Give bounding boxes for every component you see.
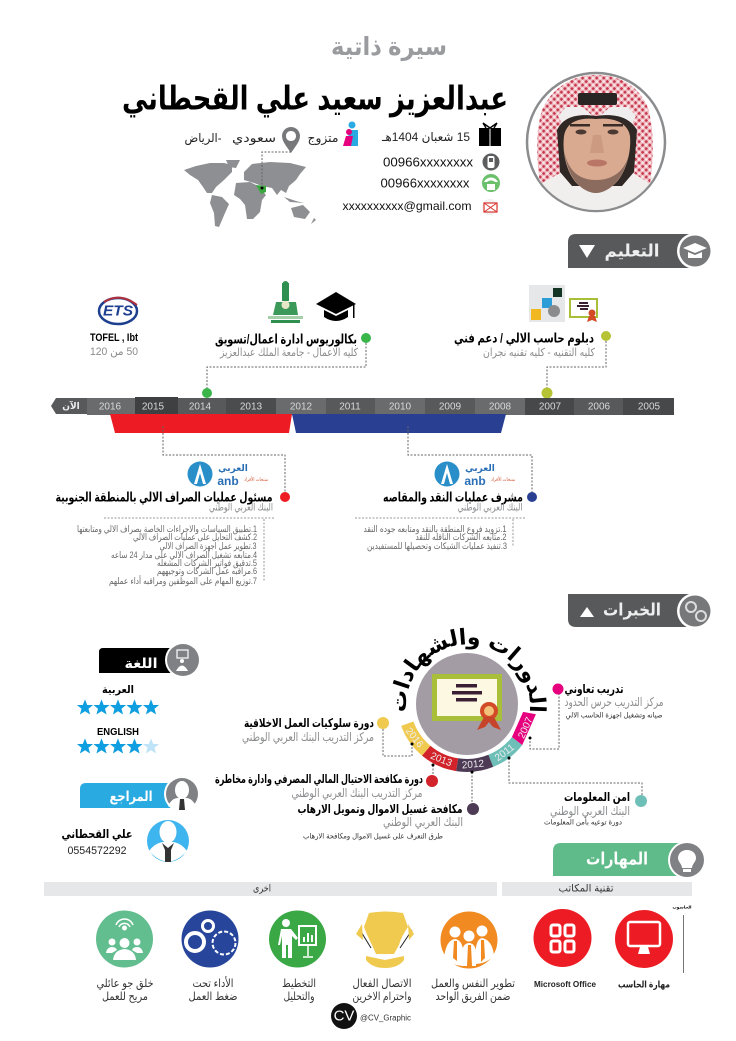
brand logo: CV [334,1008,354,1024]
courses wheel: 2013 [429,751,454,769]
icon: certificate small [570,299,597,322]
birth date: 15 شعبان 1404هـ [381,130,470,144]
icon: ETS logo: ETS [103,302,133,320]
logo: anb left: منتجات الأفراد [244,476,268,483]
title: CV: سيرة ذاتية [331,33,447,62]
job: cash supervisor: 3.تنفيذ عمليات الشيكات وتحصيلها للمستفيدين [367,541,507,551]
city: -الرياض [184,131,222,146]
section header: education: التعليم [604,242,660,260]
email: xxxxxxxxxx@gmail.com [342,199,472,213]
course: information security: البنك العربي الوطني [550,804,630,819]
timeline bar: 2009 [439,402,462,412]
course: information security: دورة توعيه بأمن المعلومات [544,816,622,826]
job: cash supervisor: مشرف عمليات النقد والمقاصه [383,490,523,504]
language: English rating [77,726,159,753]
timeline bar: 2008 [489,402,512,412]
course: ethics: دورة سلوكيات العمل الاخلاقية [244,716,374,731]
skill: pressure: ضغط العمل [188,991,238,1003]
job: cash supervisor [355,490,525,551]
course: fraud: مركز التدريب البنك العربي الوطني [292,786,422,801]
job: ATM operations: 5.تدقيق فواتير الشركات المشغله [157,558,257,568]
curved heading: الدورات والشهادات [392,628,547,712]
marital status: متزوج [308,131,338,146]
skill: family environment [96,910,154,1004]
course: co-op training: صيانه وتشغيل اجهزة الحاسب الالي [566,710,662,720]
period: blue job [292,414,506,433]
portrait photo [527,73,665,215]
course: co-op training: مركز التدريب حرس الحدود [564,695,664,710]
brand logo [331,1003,411,1029]
timeline bar: 2010 [389,402,412,412]
job: ATM operations: 6.مراقبه عمل الشركات وتوجيههم [157,566,257,577]
diploma [454,330,596,359]
job: ATM operations: 7.توزيع المهام على الموظفين ومراقبه أداء عملهم [109,575,257,587]
connector: diploma [542,331,611,398]
timeline bar: الآن [62,400,80,411]
timeline bar: 2014 [189,402,212,412]
section header: experience [568,593,713,629]
course: information security [508,756,647,826]
course: ethics [242,716,414,756]
courses wheel [392,628,547,772]
skill: planning: التخطيط [282,978,316,990]
section header: skills: المهارات [586,850,648,870]
job: ATM operations: مسئول عمليات الصراف الالي بالمنطقة الجنوبية [56,490,272,504]
icon: email [482,199,498,215]
job: cash supervisor: 2.متابعه الشركات الناقله للنقد [416,532,506,542]
timeline bar: 2011 [339,402,361,412]
skill: communication: واحترام الاخرين [352,991,412,1004]
section header: references: المراجع [110,788,152,805]
course: fraud [215,764,438,801]
skill: teamwork: ضمن الفريق الواحد [436,991,510,1004]
skill: planning: والتحليل [284,991,314,1004]
courses wheel: 2016 [403,726,425,750]
course: money laundering [298,770,479,840]
nationality: سعودي [232,131,276,146]
job: cash supervisor: 1.تزويد فروع المنطقة بالنقد ومتابعه جوده النقد [364,524,506,534]
icon: location pin [282,127,300,153]
skill: teamwork: تطوير النفس والعمل [431,978,515,991]
timeline bar [51,397,674,415]
skill: Microsoft Office [534,909,596,989]
language: Arabic rating: العربية [102,684,134,696]
logo: anb right: anb [464,474,486,488]
phone number: 00966xxxxxxxx [380,176,470,190]
skill: communication [352,912,414,1004]
band: other skills [44,882,497,896]
job: ATM operations [56,490,275,587]
job: ATM operations: 4.متابعه تشغيل الصراف الالي على مدار 24 ساعه [111,550,257,560]
referee details [62,827,132,857]
courses wheel: 2012 [461,759,485,771]
timeline bar: 2013 [240,402,263,412]
course: money laundering: طرق التعرف على غسيل الاموال ومكافحة الارهاب [303,832,443,840]
logo: anb right: العربي [465,463,495,474]
language: English rating: ENGLISH [97,726,139,738]
section header: language: اللغة [124,655,158,671]
logo: anb left: anb [217,474,239,488]
skill: computer [615,910,673,990]
language: Arabic rating [77,684,159,714]
course: money laundering: البنك العربي الوطني [383,815,463,830]
icon: referee person [147,820,189,862]
skill: communication: الاتصال الفعال [352,978,412,990]
icon: graduation cap [316,292,356,321]
brand logo: @CV_Graphic [360,1014,411,1022]
icon: couple [343,122,358,146]
timeline bar: 2007 [539,402,562,412]
TOEFL score: TOFEL , Ibt [90,332,138,344]
skill: teamwork [431,912,515,1004]
timeline bar: 2006 [588,402,611,412]
job: ATM operations: 3.تطوير عمل اجهزة الصراف الالي [160,541,256,551]
course: information security: امن المعلومات [564,790,630,805]
computer scale [672,904,692,973]
connector: blue job [408,426,537,502]
logo: anb left: العربي [218,463,248,474]
section header: education [568,233,713,269]
timeline bar: 2005 [638,402,661,412]
icon: phone [482,174,500,192]
logo: anb left [188,462,268,488]
icon: gift [479,123,501,146]
period: red job [110,414,292,433]
bachelor degree [215,332,359,359]
job: ATM operations: البنك العربي الوطني [209,502,273,514]
course: ethics: مركز التدريب البنك العربي الوطني [242,730,374,745]
timeline bar: 2015 [142,402,165,412]
courses wheel: 2011 [493,742,517,764]
section header: references [80,776,200,812]
course: co-op training: تدريب تعاوني [564,682,624,697]
skill: pressure: الأداء تحت [192,976,234,990]
bachelor degree: بكالوريوس ادارة اعمال/تسويق [215,332,357,346]
TOEFL score: 50 من 120 [90,346,138,358]
job: cash supervisor: البنك العربي الوطني [458,502,522,514]
section header: skills [553,841,706,879]
world map [184,152,316,227]
logo: anb right [434,462,515,488]
computer scale: الحاسوب [672,904,692,910]
skill: family environment: مريح للعمل [102,991,148,1004]
icon: ETS logo [99,298,137,324]
band: office technology: تقنية المكاتب [558,884,614,894]
skill: Microsoft Office: Microsoft Office [534,979,596,989]
referee details: 0554572292 [68,845,126,857]
diploma: دبلوم حاسب الالي / دعم فني [454,330,594,346]
timeline bar: 2012 [290,402,313,412]
timeline bar: 2016 [99,402,122,412]
icon: university logo [268,281,303,323]
course: money laundering: مكافحة غسيل الاموال وتمويل الارهاب [298,802,462,817]
referee details: علي القحطاني [62,827,132,841]
course: fraud: دورة مكافحة الاحتيال المالي المصرفي وادارة مخاطرة [215,772,423,787]
logo: anb right: منتجات الأفراد [491,476,515,483]
section header: language [99,642,201,678]
name heading: عبدالعزيز سعيد علي القحطاني [122,80,508,118]
section header: experience: الخبرات [603,600,661,620]
connector: red job [163,426,290,502]
icon: diploma tech tiles [529,285,565,322]
band: office technology [502,882,692,896]
course: co-op training [528,682,664,749]
TOEFL score [90,332,138,358]
skill: planning [269,910,326,1004]
skill: family environment: خلق جو عائلي [96,978,154,991]
skill: computer: مهارة الحاسب [618,980,670,990]
skill: pressure [182,910,238,1003]
icon: mobile [482,154,500,170]
diploma: كليه التقنيه - كليه تقنيه نجران [483,347,596,359]
connector: bachelor [202,333,371,398]
bachelor degree: كليه الاعمال - جامعة الملك عبدالعزيز [219,347,359,359]
job: ATM operations: 1.تطبيق السياسات والاجراءات الخاصة بصراف الالي ومتابعتها [77,524,257,534]
courses wheel: 2007 [516,715,536,740]
mobile number: 00966xxxxxxxx [383,154,474,170]
job: ATM operations: 2.كشف التحايل على عمليات الصراف الالي [133,532,257,542]
band: other skills: اخرى [253,884,271,894]
